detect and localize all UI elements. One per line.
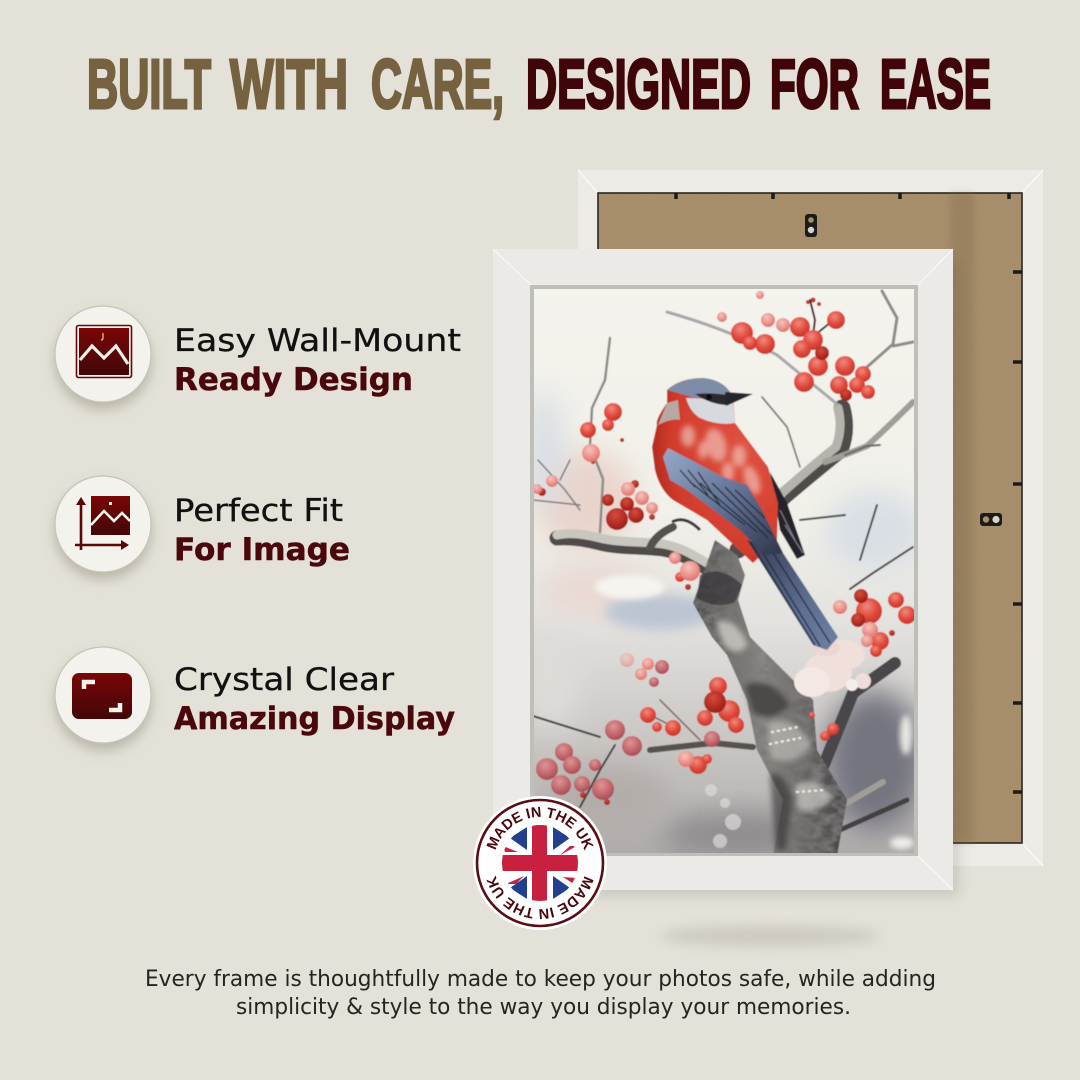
- shadow of front frame: [505, 262, 959, 896]
- badge text: [486, 806, 594, 920]
- text: perfect fit for image: Perfect Fit: [174, 493, 343, 529]
- frame floor shadow: [660, 925, 880, 947]
- feature: crystal clear: [55, 647, 455, 743]
- bird: [652, 378, 838, 650]
- footer text: [145, 967, 936, 1020]
- title: CARE,: [371, 45, 504, 123]
- neck grey patch: [658, 400, 680, 425]
- text: easy wall-mount ready design: [174, 323, 461, 398]
- back of frame: [578, 170, 1043, 866]
- text: perfect fit for image: For Image: [174, 532, 350, 568]
- tail: [747, 540, 838, 650]
- text: crystal clear amazing display: [174, 662, 455, 737]
- trunk: [693, 540, 847, 856]
- text: crystal clear amazing display: Amazing Display: [174, 701, 455, 737]
- berries: [532, 291, 916, 805]
- beak: [725, 392, 753, 406]
- blossoms: [794, 640, 871, 697]
- text: perfect fit for image: [174, 493, 350, 568]
- panel: features list: [55, 306, 461, 743]
- title: [87, 45, 991, 123]
- tabs: [676, 193, 1022, 792]
- text: easy wall-mount ready design: Easy Wall-Mount: [174, 323, 461, 359]
- watercolor washes: [520, 390, 925, 857]
- title: WITH: [230, 45, 348, 123]
- icon: clear display: [55, 647, 151, 743]
- hanger right: [980, 513, 1002, 526]
- body: [652, 378, 778, 563]
- badge: made in the uk: [473, 796, 607, 930]
- feature: perfect fit: [55, 476, 350, 572]
- feature: easy wall-mount: [55, 306, 461, 402]
- feather: dark wing tip: [770, 472, 805, 559]
- hanger top: [805, 214, 817, 237]
- badge text: MADE IN THE UK: [486, 806, 594, 850]
- poster: bird on berry branch: [520, 288, 925, 857]
- title: FOR: [770, 45, 859, 123]
- footer text: simplicity & style to the way you display your memories.: [236, 995, 851, 1020]
- branches: [533, 291, 913, 830]
- icon: resize picture: [55, 476, 151, 572]
- wing: [663, 448, 783, 555]
- bird foot: [672, 520, 700, 530]
- head: [667, 378, 733, 398]
- badge text: MADE IN THE UK: [486, 876, 594, 920]
- title: BUILT: [87, 45, 211, 123]
- breast mottling: [681, 425, 764, 496]
- title: DESIGNED: [526, 45, 751, 123]
- text: crystal clear amazing display: Crystal Clear: [174, 662, 394, 698]
- footer text: Every frame is thoughtfully made to keep your photos safe, while adding: [145, 967, 936, 992]
- front frame: [493, 249, 953, 890]
- text: easy wall-mount ready design: Ready Design: [174, 362, 413, 398]
- icon: wall-mount picture: [55, 306, 151, 402]
- title: EASE: [880, 45, 991, 123]
- union jack flag: [502, 825, 578, 901]
